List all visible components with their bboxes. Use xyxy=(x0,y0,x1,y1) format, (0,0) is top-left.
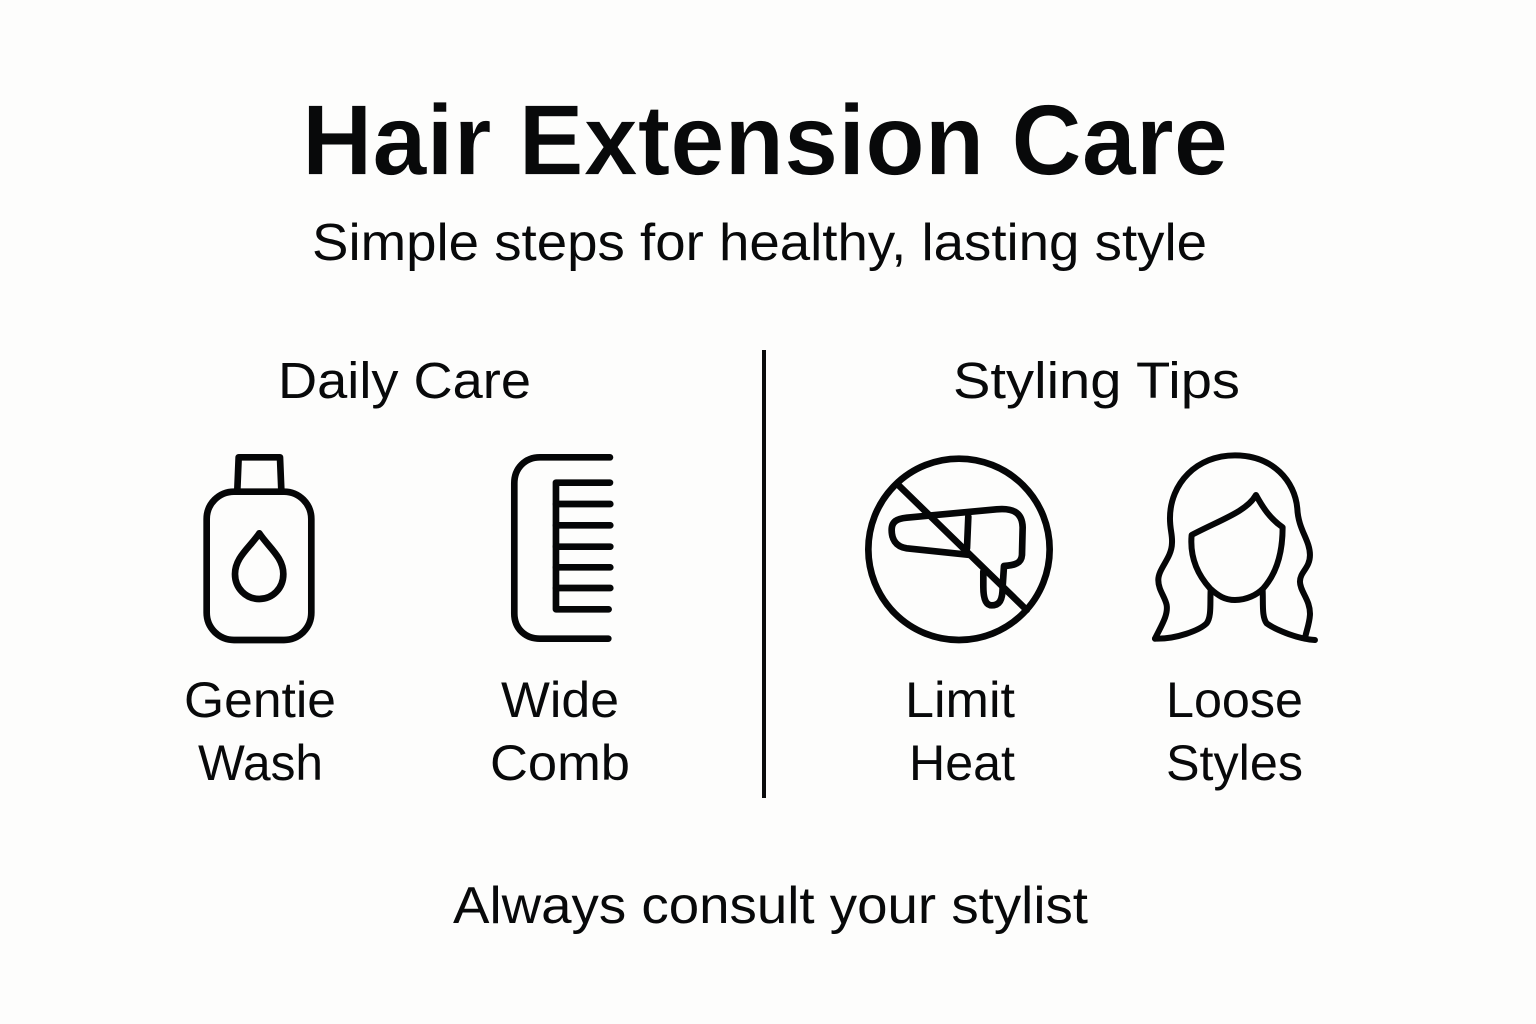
label: limit heat: Limit xyxy=(905,672,1015,728)
label: limit heat: Heat xyxy=(909,735,1015,791)
label: gentle wash: Wash xyxy=(198,735,323,791)
label: loose styles xyxy=(1166,672,1303,791)
center divider xyxy=(762,350,766,798)
label: loose styles: Styles xyxy=(1166,735,1303,791)
label: wide comb: Comb xyxy=(490,735,630,791)
subtitle: Simple steps for healthy, lasting style xyxy=(312,214,1207,272)
label: limit heat xyxy=(905,672,1015,791)
label: gentle wash xyxy=(184,672,336,791)
title: Hair Extension Care xyxy=(302,84,1228,196)
footer note: Always consult your stylist xyxy=(453,877,1089,935)
label: gentle wash: Gentie xyxy=(184,672,336,728)
icon: wide tooth comb xyxy=(514,457,610,639)
label: loose styles: Loose xyxy=(1166,672,1303,728)
icon: no heat hair dryer xyxy=(868,459,1050,640)
icon: shampoo bottle with water drop xyxy=(207,457,311,640)
heading: styling tips: Styling Tips xyxy=(953,352,1240,409)
heading: daily care: Daily Care xyxy=(278,352,531,409)
label: wide comb xyxy=(490,672,630,791)
label: wide comb: Wide xyxy=(501,672,619,728)
icon: woman with loose wavy hair xyxy=(1155,455,1315,640)
